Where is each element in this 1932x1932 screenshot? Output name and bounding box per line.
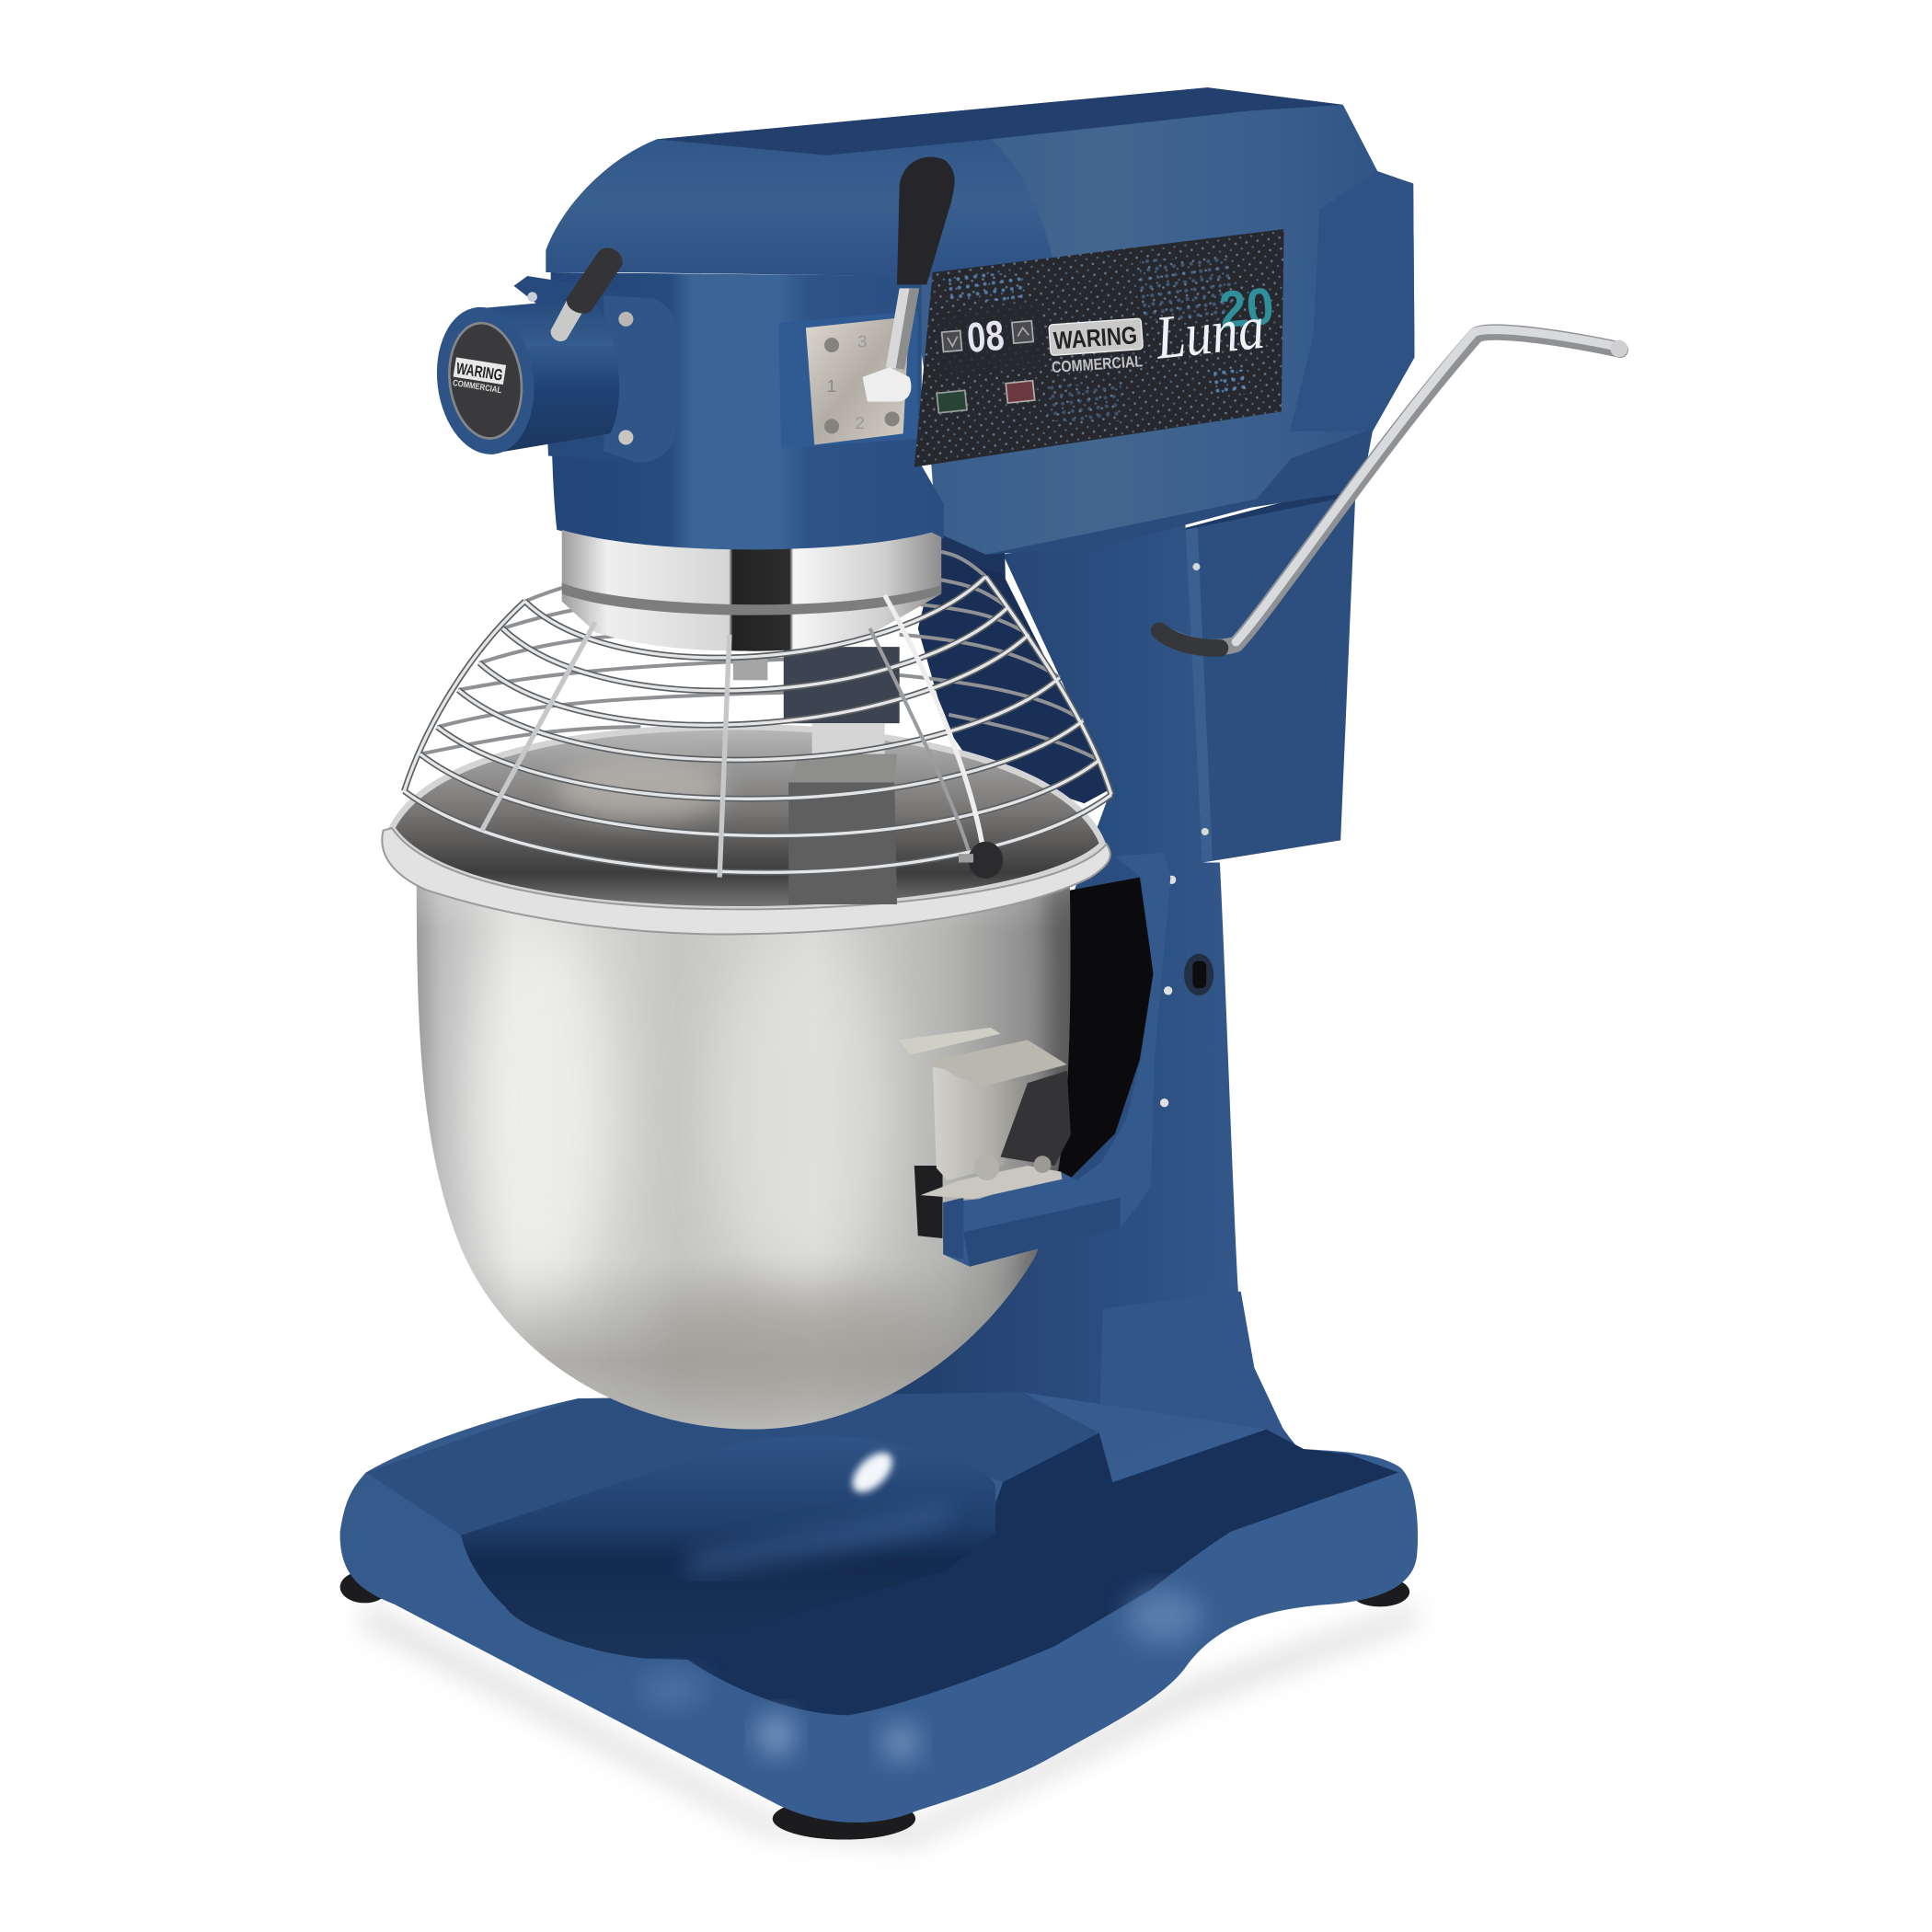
speed selector plate: 3 (857, 332, 868, 351)
head support bracket (924, 517, 1006, 579)
guard ribs (482, 595, 982, 878)
panel logo: COMMERCIAL (1051, 351, 1144, 376)
clamp top flap (930, 1040, 1067, 1087)
panel dark centre (939, 303, 1042, 375)
speed knob lever (551, 247, 623, 341)
clamp latch (920, 1166, 1062, 1199)
up button (1012, 321, 1033, 343)
speed knob cylinder (483, 298, 619, 454)
clamp dark side (1001, 1071, 1071, 1166)
cast iron base (340, 1392, 1418, 1823)
speed selector plate: 2 (855, 413, 865, 432)
speed display: 08 (965, 312, 1006, 362)
soft floor shadow (357, 1602, 1417, 1848)
speed selector plate (806, 316, 909, 444)
speed knob flange (513, 276, 678, 463)
bowl (382, 727, 1110, 1442)
knob logo: WARING (455, 359, 504, 385)
rear lift housing (1085, 480, 1365, 863)
panel logo: WARING (1052, 321, 1138, 354)
bowl lock clamp (898, 1028, 1071, 1199)
guard wire shadow (404, 577, 1111, 872)
head neck (551, 272, 944, 551)
model name: Luna (1152, 293, 1268, 373)
column lower pillar (1099, 1292, 1294, 1482)
wire safety guard (404, 577, 1111, 878)
down button (942, 330, 962, 351)
power switch (1184, 954, 1213, 995)
bowl cradle arm (914, 853, 1170, 1267)
panel blue dot clusters (949, 259, 1246, 421)
pedestal column (863, 517, 1318, 1590)
control panel (914, 229, 1284, 467)
base right groove (644, 1430, 1398, 1715)
chrome collar (562, 530, 941, 651)
base tray hump (461, 1436, 995, 1659)
speed lever (863, 157, 955, 402)
plate recess (778, 311, 918, 449)
black bowl recess (1010, 878, 1154, 1189)
column dark front recess (918, 555, 1111, 803)
guard back wires (420, 549, 1099, 760)
guard wire highlight (404, 577, 1111, 872)
infographic: stand mixer product illustration (340, 87, 1628, 1853)
base top face (366, 1392, 1112, 1535)
motor housing (853, 87, 1415, 555)
knob logo: COMMERCIAL (452, 378, 502, 395)
bowl interior (392, 727, 1103, 909)
base highlights (845, 1445, 900, 1500)
knob logo (452, 357, 506, 395)
clamp plate (933, 1067, 1028, 1180)
red stop button (1006, 381, 1035, 403)
speed selector plate: 1 (827, 376, 836, 396)
interior reflection (555, 756, 727, 821)
agitator shaft (733, 647, 900, 904)
mixer head (429, 87, 1414, 555)
rear crank lift handle (1159, 329, 1627, 648)
clamp rear flap (898, 1028, 1001, 1054)
head casting top (546, 121, 1057, 281)
guard clamp knob (959, 842, 1003, 879)
panel logo (1049, 318, 1144, 376)
bowl rim (382, 828, 1110, 935)
speed knob cap (429, 302, 542, 460)
model number: 20 (1217, 276, 1276, 339)
green start button (937, 390, 967, 413)
rubber feet (340, 1571, 1409, 1840)
